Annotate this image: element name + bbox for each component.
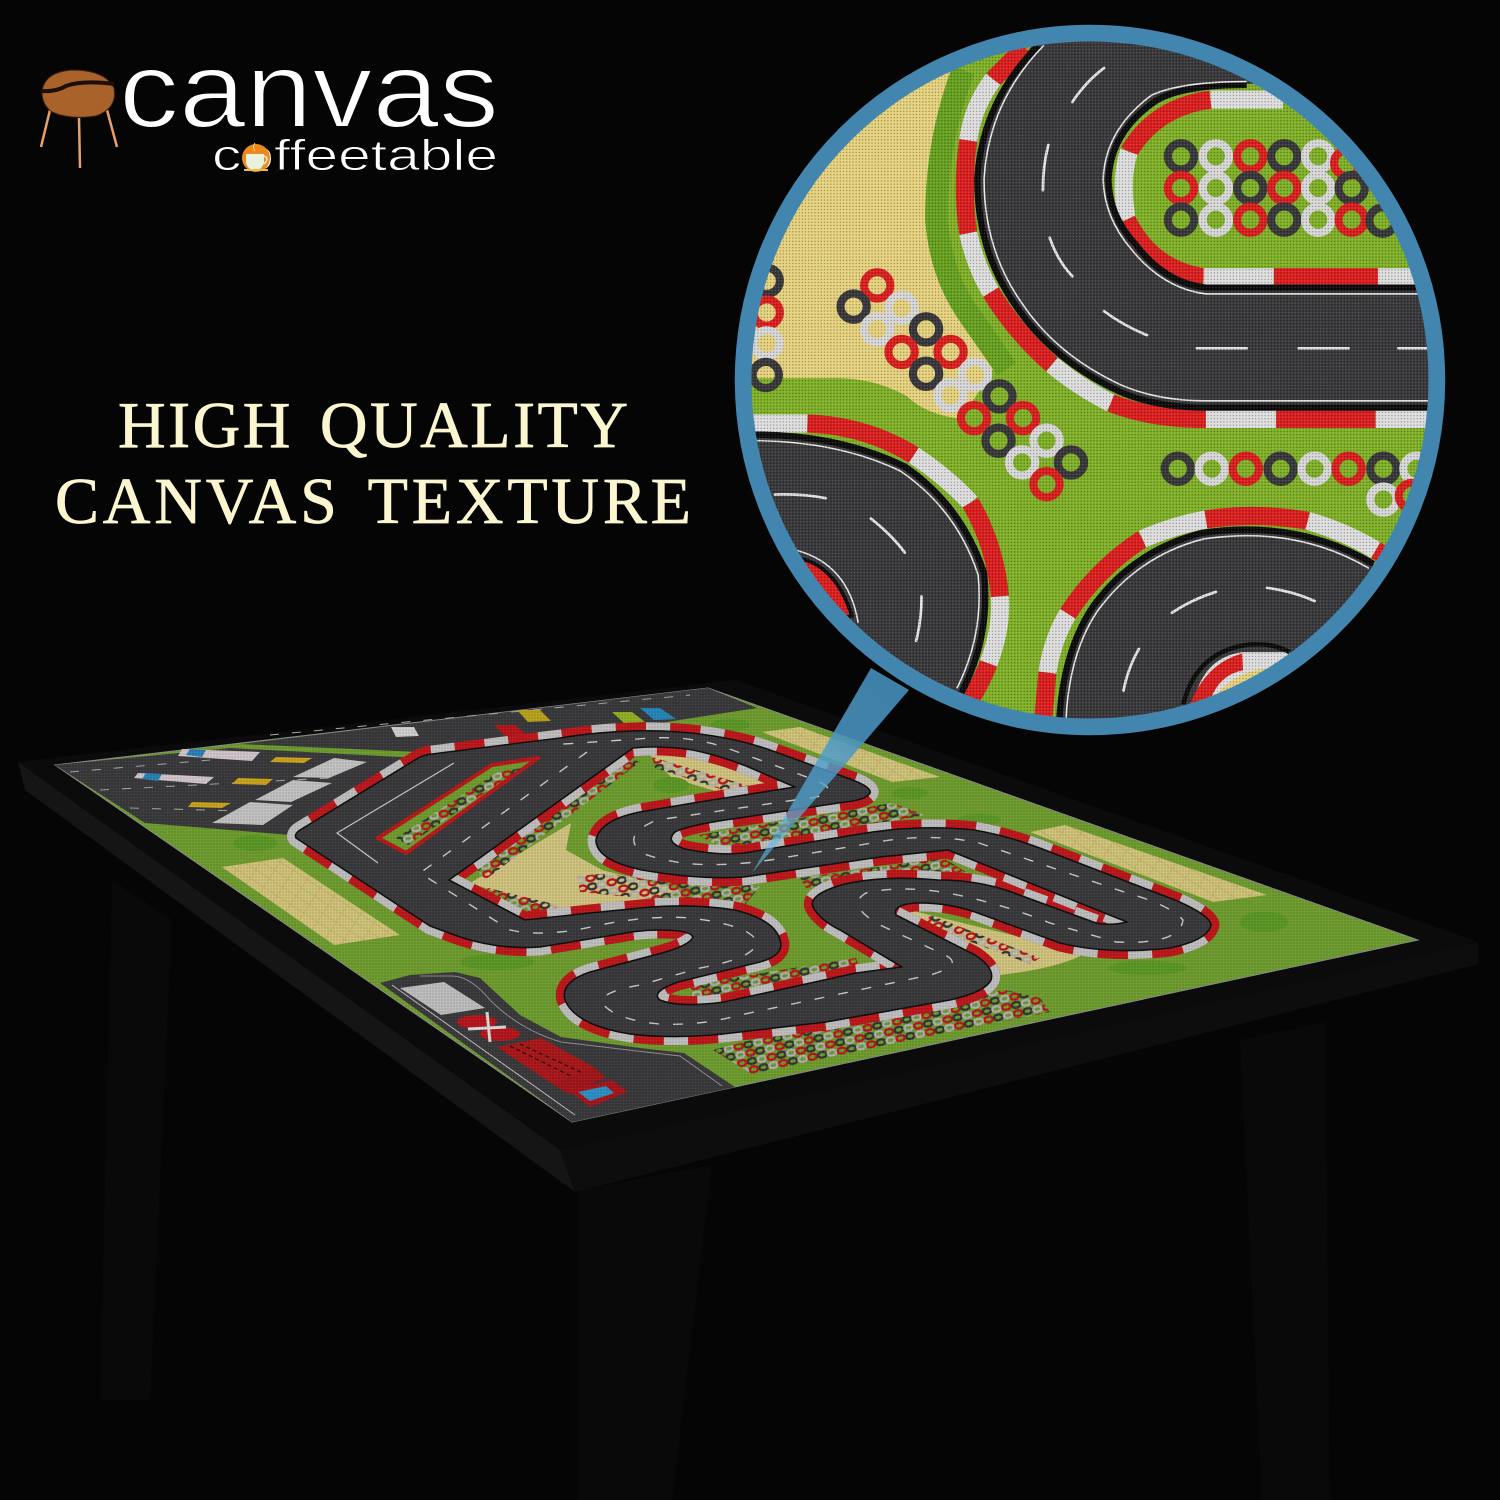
- heading line 1: HIGH QUALITY: [118, 389, 628, 462]
- island tyres: [396, 768, 522, 845]
- narrow island: [378, 758, 538, 853]
- brand name: canvas: [119, 29, 499, 150]
- track solid lane line: [337, 763, 454, 863]
- table legs: [100, 880, 1330, 1500]
- brand subtitle: coffeetable: [212, 131, 498, 180]
- lens road upper right: [965, 34, 1441, 419]
- table: [18, 680, 1478, 1192]
- parking roads: [55, 688, 757, 835]
- icon: coffee bean stool: [41, 70, 117, 168]
- lens blue ring: [743, 33, 1437, 727]
- heading: [55, 389, 691, 538]
- heading line 2: CANVAS TEXTURE: [55, 465, 691, 538]
- race track: [296, 731, 1211, 1037]
- lens sand: [744, 66, 993, 419]
- truck road: [380, 972, 735, 1122]
- logo: [41, 29, 499, 180]
- lens content: [735, 25, 1445, 735]
- sand fields: [222, 727, 1267, 975]
- track centre line: [420, 738, 1183, 1024]
- lens deeper green band: [936, 70, 1007, 369]
- lens green ground: [752, 46, 1426, 717]
- lens road lower left: [744, 423, 1000, 704]
- lens tyres: [753, 143, 1430, 513]
- callout pointer: [752, 668, 909, 873]
- icon: coffee cup: [242, 143, 270, 172]
- bushes: [233, 719, 1288, 975]
- canvas weave overlay: [55, 688, 1418, 1122]
- track asphalt: [296, 731, 1211, 1037]
- table frame: [18, 680, 1478, 1192]
- parked vehicles and pads: [134, 708, 676, 825]
- lens weave overlay: [735, 25, 1445, 735]
- tyre stacks: [476, 757, 1050, 1074]
- magnified canvas texture callout: [735, 25, 1445, 735]
- track kerbs: [296, 731, 1211, 1037]
- lens road lower right: [1043, 516, 1423, 731]
- kerbs: [965, 48, 1441, 419]
- table surface: green play mat: [55, 688, 1418, 1122]
